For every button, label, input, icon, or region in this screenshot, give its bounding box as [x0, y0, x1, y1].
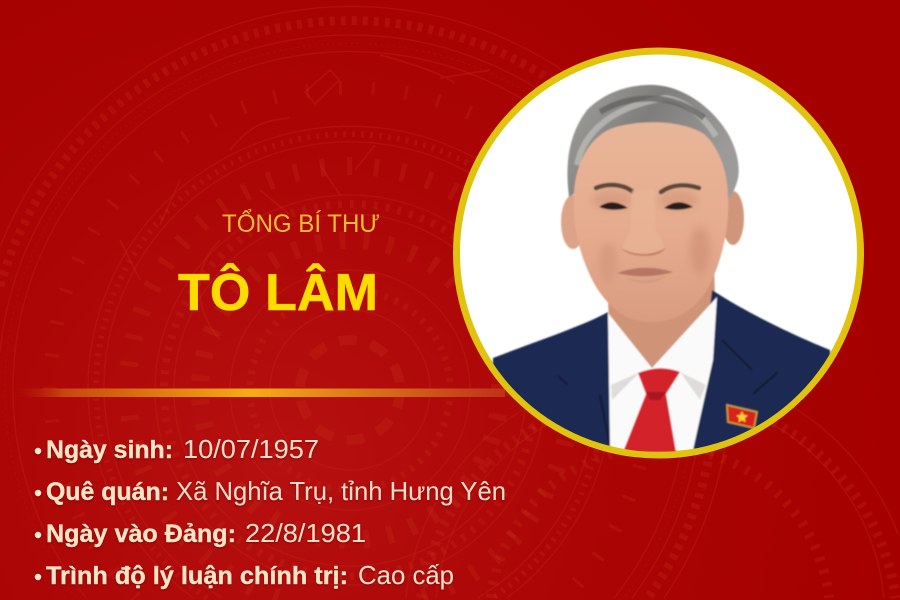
fact: party entry date — [35, 518, 366, 548]
suit jacket — [492, 290, 831, 449]
person photo illustration — [493, 85, 830, 470]
fact: political theory level: Cao cấp — [358, 560, 454, 590]
eyebrows — [596, 185, 632, 191]
fact: hometown: Xã Nghĩa Trụ, tỉnh Hưng Yên — [176, 476, 506, 506]
cheek shading — [601, 246, 615, 276]
fact list — [35, 434, 506, 590]
lapel shadow — [558, 340, 778, 447]
ears — [560, 194, 580, 250]
fact: hometown — [35, 476, 506, 506]
tie — [623, 368, 680, 452]
fact: party entry date: Ngày vào Đảng: — [46, 520, 236, 548]
portrait — [456, 51, 860, 470]
fact: party entry date: 22/8/1981 — [245, 518, 366, 548]
eyes — [599, 202, 628, 210]
fact: political theory level — [35, 560, 454, 590]
fact: political theory level: Trình độ lý luận chính trị: — [46, 562, 348, 590]
name: TÔ LÂM: TÔ LÂM — [178, 263, 378, 322]
shirt — [608, 297, 717, 450]
fact: birth date: Ngày sinh: — [46, 436, 173, 464]
portrait ring — [456, 51, 860, 455]
face — [574, 122, 728, 322]
fact: birth date: 10/07/1957 — [183, 434, 319, 464]
neck — [607, 274, 716, 368]
fact: birth date — [35, 434, 319, 464]
fact: hometown: Quê quán: — [46, 478, 169, 506]
gold divider — [15, 388, 505, 397]
subtitle: TỔNG BÍ THƯ: TỔNG BÍ THƯ — [222, 208, 380, 238]
lapel pin — [727, 405, 757, 428]
hair — [567, 85, 739, 198]
nose — [624, 189, 660, 252]
mouth — [617, 268, 673, 276]
